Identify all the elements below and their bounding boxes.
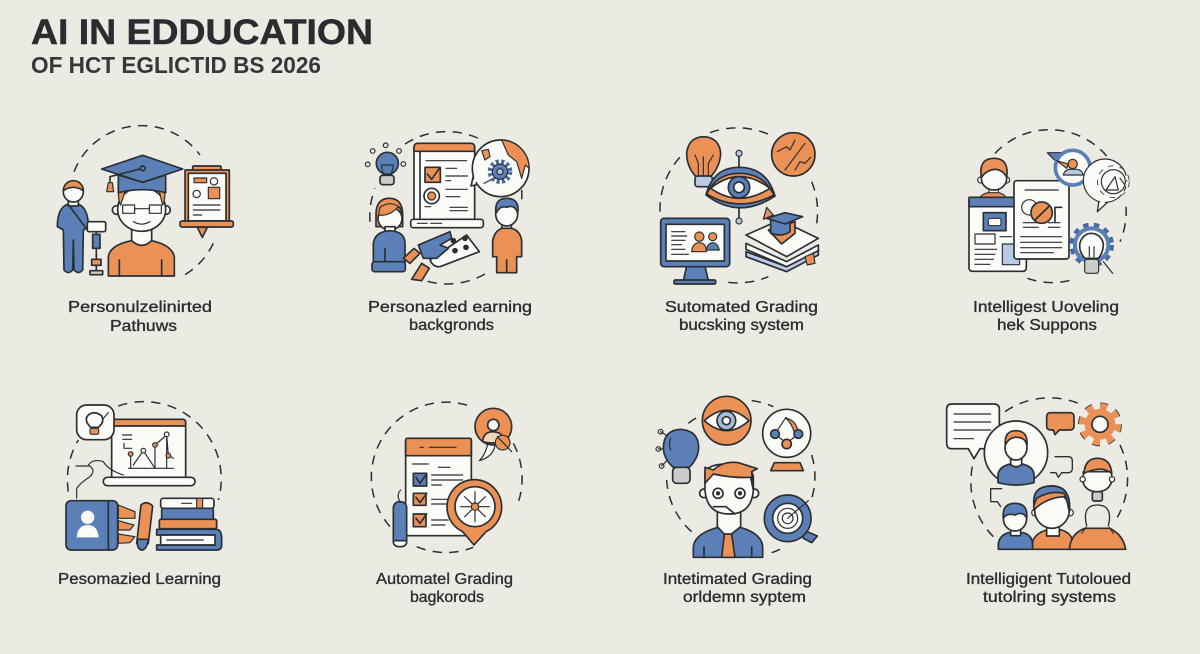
speech bubble with text (947, 404, 999, 459)
blue book (66, 501, 118, 550)
books and cap (746, 207, 818, 272)
label (368, 299, 532, 334)
label (973, 299, 1119, 334)
panel: automated grading system (660, 128, 818, 334)
label: Automatel Grading (376, 571, 513, 588)
panel: intelligent tutoring systems (947, 398, 1131, 606)
icon: man, eye, bulb and target (656, 396, 817, 557)
label: Intelligigent Tutoloued (966, 571, 1131, 588)
network globe (763, 409, 811, 471)
bulb badge (77, 405, 114, 440)
icon: student with graduation cap (57, 126, 233, 276)
location pin (447, 480, 502, 545)
man (693, 462, 763, 557)
label: tutolring systems (983, 589, 1116, 606)
monitor (661, 218, 730, 284)
person with bulb head (1069, 458, 1126, 549)
label: bucsking system (679, 317, 804, 334)
board with report (180, 166, 233, 237)
gear (1083, 408, 1117, 441)
checklist document (406, 438, 471, 536)
label: Intetimated Grading (663, 571, 812, 588)
title: AI IN EDDUCATION (31, 13, 373, 52)
eye (706, 150, 775, 224)
document (1014, 181, 1069, 259)
child (998, 503, 1033, 549)
woman (372, 198, 405, 272)
orange bubble (1047, 413, 1074, 435)
profile badge (475, 408, 512, 461)
label (665, 299, 818, 334)
bulb (656, 429, 699, 483)
pencil (137, 503, 153, 550)
icon: checklist and location pin (371, 402, 522, 553)
man (493, 198, 522, 273)
icon: group of learners with speech bubbles (947, 398, 1128, 549)
icon: laptop chart and books (66, 402, 222, 550)
gear bubble (1083, 159, 1127, 212)
label: Intelligest Uoveling (973, 299, 1119, 316)
label (376, 571, 513, 606)
label: Pesomazied Learning (58, 571, 221, 588)
bulb (365, 143, 406, 185)
adult (1032, 486, 1073, 549)
chart circle (772, 133, 815, 176)
panel: personalized learning backgrounds (365, 132, 532, 334)
tablet checklist (411, 143, 483, 228)
title: OF HCT EGLICTID BS 2026 (31, 52, 321, 78)
small bubbles (991, 457, 1072, 507)
label: Pathuws (110, 318, 177, 335)
label (966, 571, 1131, 606)
title (31, 13, 373, 78)
gear bulb (1072, 226, 1113, 273)
blue tube (393, 490, 407, 547)
hand, tablet device and arm (403, 232, 479, 281)
panel: personalized learning (58, 402, 222, 588)
panel: automated grading backgrounds (371, 402, 522, 606)
label: hek Suppons (997, 317, 1097, 334)
label: bagkorods (410, 589, 484, 606)
icon: person, documents and gears (969, 130, 1127, 283)
icon: tablet, learners and bulb (365, 132, 529, 284)
label: Personulzelinirted (68, 299, 212, 316)
target magnifier (764, 495, 817, 543)
book stack (157, 498, 222, 550)
big student (102, 155, 183, 276)
label: orldemn syptem (683, 589, 806, 606)
label: backgronds (409, 317, 494, 334)
panel: intelligent tutoring support (969, 130, 1127, 334)
magnifier badge (1047, 150, 1090, 185)
laptop chart (103, 419, 195, 486)
web window (969, 197, 1026, 271)
eye circle (702, 396, 751, 445)
label: Sutomated Grading (665, 299, 818, 316)
panel: intimated grading system (656, 396, 817, 606)
label (663, 571, 812, 606)
label (68, 299, 212, 335)
wire (76, 461, 123, 498)
bulb (687, 137, 721, 187)
speech bubble with gear (471, 140, 529, 197)
icon: eye, bulb, monitor and books (660, 128, 818, 284)
label: Personazled earning (368, 299, 532, 316)
small person with machine (57, 181, 106, 275)
panel: personalized pathways (57, 126, 233, 335)
orange fingers (118, 505, 135, 543)
portrait circle (984, 421, 1048, 485)
person (978, 158, 1010, 197)
